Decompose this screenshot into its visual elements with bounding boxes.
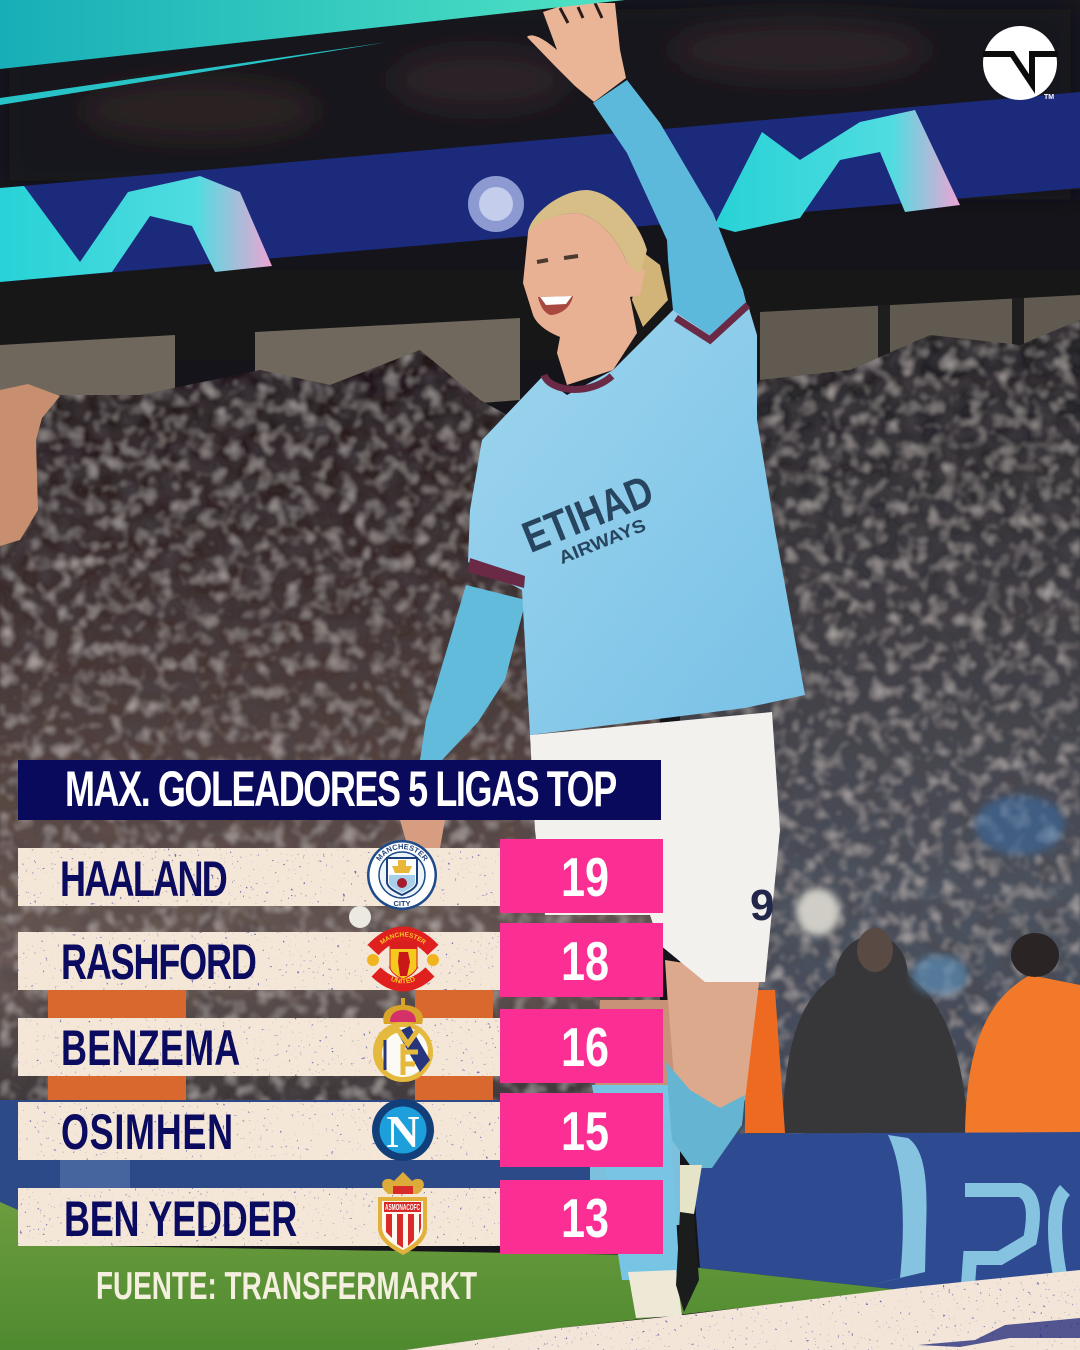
row: Benzema bbox=[18, 998, 663, 1083]
title bar: MAX. GOLEADORES 5 LIGAS TOP bbox=[65, 762, 617, 817]
sponsor text: ETIHAD bbox=[516, 466, 660, 563]
player: Haaland bbox=[400, 3, 805, 1318]
row: Ben Yedder bbox=[18, 1172, 663, 1255]
row: Rashford: RASHFORD bbox=[61, 935, 257, 990]
row: Benzema: BENZEMA bbox=[61, 1021, 240, 1076]
logo: TN mark: TM bbox=[1044, 94, 1054, 101]
icon: Napoli crest bbox=[372, 1099, 434, 1161]
row: Ben Yedder: 13 bbox=[561, 1187, 609, 1249]
source text: FUENTE: TRANSFERMARKT bbox=[96, 1265, 477, 1308]
left teammate arm bbox=[0, 384, 60, 546]
corner accent: teal bbox=[0, 0, 625, 105]
row: Rashford bbox=[18, 923, 663, 997]
row: Osimhen bbox=[18, 1093, 663, 1167]
row: Benzema: 16 bbox=[561, 1016, 609, 1078]
spectators foreground bbox=[48, 795, 1080, 1140]
sponsor text: AIRWAYS bbox=[556, 515, 649, 568]
hand by shorts bbox=[400, 820, 445, 848]
icon: Manchester United crest: UNITED bbox=[391, 976, 415, 984]
icon: Manchester United crest: MANCHESTER bbox=[380, 932, 426, 944]
table: top scorers bbox=[18, 760, 663, 1255]
raised arm bbox=[593, 80, 748, 337]
head bbox=[523, 213, 645, 385]
shorts bbox=[530, 712, 780, 982]
row: Haaland: HAALAND bbox=[60, 852, 228, 907]
icon: Manchester United crest bbox=[367, 926, 439, 992]
ponytail bbox=[632, 250, 668, 327]
icon: Napoli crest: N bbox=[386, 1106, 420, 1157]
row: Osimhen: 15 bbox=[561, 1100, 609, 1162]
banner: champions league bbox=[0, 92, 1080, 282]
legs bbox=[665, 960, 760, 1160]
icon: Real Madrid crest bbox=[373, 998, 433, 1082]
icon: Manchester City crest bbox=[367, 840, 437, 910]
row: Haaland: 19 bbox=[561, 846, 609, 908]
icon: Monaco crest bbox=[378, 1172, 427, 1255]
torn paper: bottom right bbox=[405, 1270, 1080, 1350]
lower arm bbox=[420, 585, 526, 760]
icon: Manchester City crest: MANCHESTER bbox=[376, 844, 428, 862]
icon: Monaco crest: ASMONACOFC bbox=[385, 1203, 420, 1212]
row: Haaland bbox=[18, 839, 663, 913]
icon: Manchester City crest: CITY bbox=[393, 899, 411, 908]
player: Haaland: 9 bbox=[750, 881, 774, 930]
icon: starball bbox=[468, 176, 524, 232]
row: Rashford: 18 bbox=[561, 930, 609, 992]
row: Ben Yedder: BEN YEDDER bbox=[64, 1192, 297, 1247]
raised hand bbox=[527, 3, 626, 102]
logo: TN mark bbox=[983, 26, 1058, 101]
row: Osimhen: OSIMHEN bbox=[61, 1105, 233, 1160]
shirt bbox=[468, 305, 805, 735]
ad boards and pitch bbox=[0, 1095, 1080, 1350]
hair bbox=[528, 190, 647, 275]
